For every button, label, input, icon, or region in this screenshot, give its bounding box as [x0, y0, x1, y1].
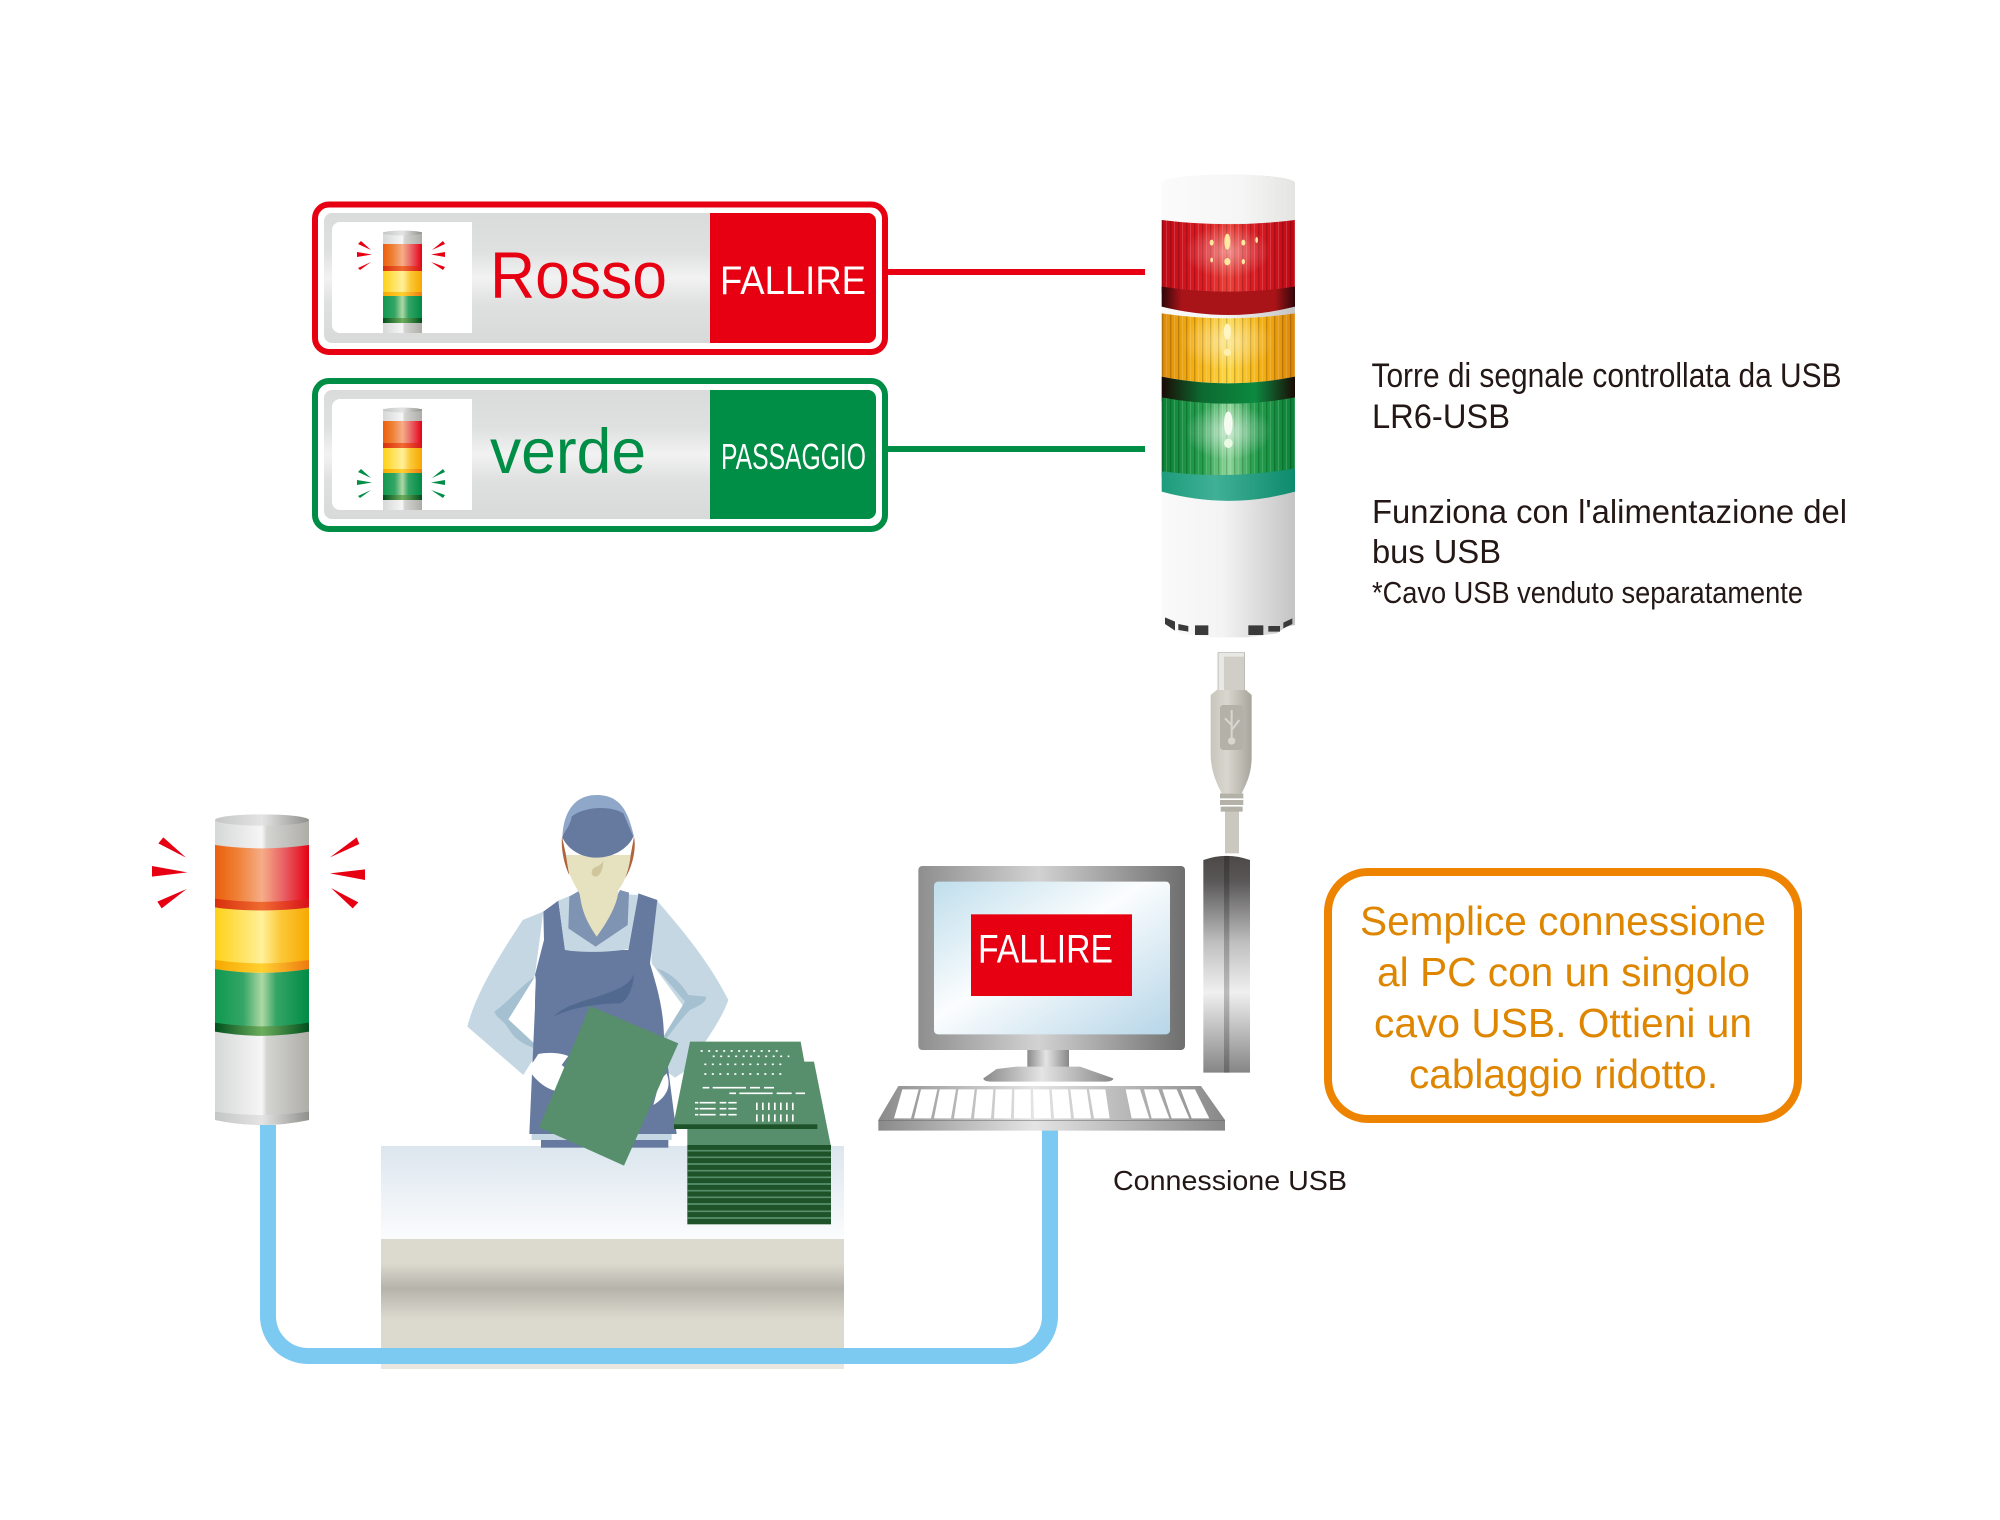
status label box: PASSAGGIO: PASSAGGIO: [721, 436, 866, 477]
callout: simple PC connection: cablaggio ridotto.: [1409, 1051, 1718, 1097]
large USB signal tower: [1162, 175, 1295, 637]
callout: simple PC connection: [1328, 872, 1798, 1119]
monitor: [918, 866, 1185, 1082]
panel: red status row: [315, 204, 885, 352]
desk: [381, 1146, 844, 1369]
callout: simple PC connection: Semplice connessione: [1360, 898, 1766, 944]
text: tower description: LR6-USB: [1372, 398, 1510, 436]
worker: [467, 795, 728, 1148]
USB cable: tower to computer: [268, 1125, 1050, 1356]
icon: small signal tower with red flashing: [332, 222, 472, 333]
icon: small signal tower with green flashing: [332, 399, 472, 510]
connector line: green: [887, 446, 1145, 452]
connector line: red: [887, 269, 1145, 275]
PC tower: [1203, 856, 1250, 1073]
label: Rosso: Rosso: [490, 238, 667, 312]
status label box: FALLIRE: FALLIRE: [720, 259, 866, 303]
stack of circuit boards: [673, 1042, 831, 1224]
text: tower description: Torre di segnale controllata da USB: [1372, 357, 1842, 395]
screen message: FALLIRE: [971, 914, 1132, 996]
keyboard: [878, 1086, 1225, 1131]
computer and USB plug: [878, 653, 1252, 1131]
panel: green status row: [315, 381, 885, 529]
label: verde: verde: [490, 417, 646, 487]
text: tower description: [1372, 357, 1847, 610]
callout: simple PC connection: cavo USB. Ottieni un: [1374, 1000, 1752, 1046]
text: tower description: *Cavo USB venduto separatamente: [1372, 575, 1803, 610]
callout: simple PC connection: al PC con un singolo: [1377, 949, 1750, 995]
status label box: PASSAGGIO: [710, 390, 876, 519]
status label box: FALLIRE: [710, 213, 876, 343]
screen message: FALLIRE: FALLIRE: [978, 928, 1113, 972]
icon: USB plug and cable: [1211, 653, 1252, 853]
circuit board held by worker: [539, 1006, 678, 1166]
worker with circuit boards: [467, 795, 831, 1224]
label: USB connection: Connessione USB: [1113, 1165, 1347, 1196]
text: tower description: bus USB: [1372, 533, 1501, 570]
signal tower flashing red: [152, 814, 365, 1125]
text: tower description: Funziona con l'alimentazione del: [1372, 493, 1847, 530]
